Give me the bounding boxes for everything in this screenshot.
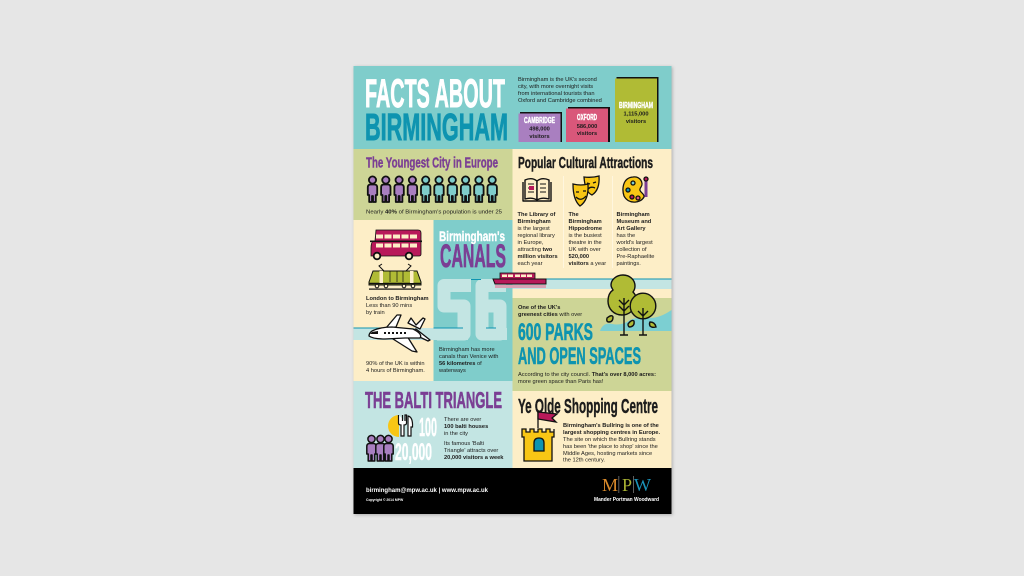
intro text: Birmingham is the UK's second [518, 77, 597, 83]
panel: balti triangle [354, 381, 512, 468]
text: canal fact: Birmingham has more [439, 347, 495, 353]
text: canal fact [438, 347, 498, 374]
bar: Oxford: 586,000 [577, 124, 597, 130]
text: hippodrome: is the busiest [568, 233, 602, 239]
text: hippodrome: UK with over [568, 247, 601, 253]
text: balti visitors: 20,000 visitors a week [444, 455, 504, 461]
icon: plane [369, 315, 430, 352]
text: library: Birmingham [518, 219, 551, 225]
text: library: The Library of [518, 212, 556, 218]
number 20,000: 20,000 [395, 439, 432, 466]
contact details: birmingham@mpw.ac.uk | www.mpw.ac.uk [366, 488, 489, 494]
bar: Birmingham: visitors [626, 119, 646, 125]
logo: MPW [602, 475, 651, 495]
text: library [518, 212, 558, 267]
big number 56 [434, 280, 507, 340]
text: museum: has the [616, 233, 635, 239]
panel: popular cultural attractions [512, 149, 672, 279]
text: train time: by train [366, 310, 385, 316]
text: bullring: has been 'the place to shop' since the [563, 444, 658, 450]
text: hippodrome: The [568, 212, 579, 218]
panel: canals [434, 220, 512, 381]
text: bullring [563, 423, 660, 464]
text: train time [366, 296, 429, 316]
heading: 600 parks [518, 319, 641, 370]
text: balti houses: in the city [444, 431, 468, 437]
logo: MPW: M [602, 475, 618, 495]
heading: canals: Birmingham's [439, 228, 505, 244]
text: balti visitors [444, 441, 504, 461]
text: bullring: the 12th century. [563, 458, 605, 464]
text: library: in Europe, [518, 240, 544, 246]
panel: balti triangle: 100 [419, 412, 437, 442]
intro text: from international tourists than [518, 91, 595, 97]
bar: Birmingham: BIRMINGHAM [619, 101, 653, 110]
heading: balti triangle: THE BALTI TRIANGLE [365, 387, 502, 413]
icon: castle [522, 411, 557, 461]
heading: 600 parks: AND OPEN SPACES [518, 343, 641, 370]
text: greenest cities [518, 305, 582, 318]
text: library: regional library [518, 233, 555, 239]
text: travel distance: 90% of the UK is within [366, 361, 424, 367]
pictogram: ten people, four highlighted [368, 176, 497, 202]
title [365, 72, 508, 149]
text: bullring: largest shopping centres in Europe. [563, 430, 660, 436]
text: hippodrome: Birmingham [568, 219, 602, 225]
panel: canals: CANALS [440, 238, 506, 274]
text: hippodrome [568, 212, 606, 267]
text: balti visitors: Triangle' attracts over [444, 448, 498, 454]
bar: Cambridge: 498,000 [529, 126, 550, 132]
bar: Cambridge: visitors [529, 134, 550, 140]
logo: MPW: W [634, 475, 651, 495]
icon: open book [523, 179, 551, 201]
text: bullring: Middle Ages, hosting markets since [563, 451, 652, 457]
text: balti houses: There are over [444, 417, 481, 423]
bar: Cambridge: CAMBRIDGE [524, 116, 555, 125]
text: greenest cities: greenest cities with over [518, 312, 582, 318]
icon: theatre masks [573, 176, 599, 206]
title: BIRMINGHAM [365, 107, 508, 149]
text: museum: collection of [616, 247, 647, 253]
heading: shopping centre: Ye Olde Shopping Centre [518, 396, 658, 418]
text: travel distance [366, 361, 425, 374]
text: hippodrome: 520,000 [568, 254, 589, 260]
icon: group of people [367, 435, 393, 461]
panel: transport [354, 220, 434, 381]
text: museum: Pre-Raphaelite [616, 254, 654, 260]
copyright: Copyright © 2014 MPW [366, 498, 404, 502]
poster background [354, 66, 672, 514]
text: canal fact: canals than Venice with [439, 354, 498, 360]
text: hippodrome: visitors a year [568, 261, 606, 267]
text: museum: world's largest [616, 240, 653, 246]
text: balti houses: 100 balti houses [444, 424, 488, 430]
intro text: Oxford and Cambridge combined [518, 98, 602, 104]
text: balti visitors: Its famous 'Balti [444, 441, 484, 447]
intro text [518, 77, 602, 104]
icon: palette [623, 177, 648, 202]
text: canal fact: 56 kilometres of [439, 361, 482, 367]
logo: MPW: P [622, 475, 632, 495]
intro text: city, with more overnight visits [518, 84, 593, 90]
text: hippodrome: theatre in the [568, 240, 602, 246]
text: library: attracting two [518, 247, 553, 253]
title: FACTS ABOUT [365, 72, 505, 116]
caption: green space: According to the city council. That's over 8,000 acres: [518, 372, 656, 378]
logo caption: Mander Portman Woodward [594, 497, 659, 503]
heading: canals [439, 228, 506, 274]
text: museum: Birmingham [616, 212, 650, 218]
heading: youngest city: The Youngest City in Europe [366, 154, 498, 172]
bar: Oxford: OXFORD [577, 113, 597, 122]
text: bullring: The site on which the Bullring stands [563, 437, 656, 443]
icon: cutlery [388, 415, 413, 437]
bar: Oxford [566, 107, 610, 142]
text: museum: paintings. [616, 261, 641, 267]
panel: footer [354, 468, 672, 514]
panel: shopping centre [512, 391, 672, 468]
bar: Oxford: visitors [577, 131, 597, 137]
text: balti houses [444, 417, 488, 437]
panel: youngest city [354, 149, 512, 220]
text: train time: London to Birmingham [366, 296, 429, 302]
bar: Birmingham [615, 77, 658, 142]
text: library: each year [518, 261, 543, 267]
text: greenest cities: One of the UK's [518, 305, 560, 311]
caption: green space: more green space than Paris has! [518, 379, 604, 385]
bar: Birmingham: 1,115,000 [624, 112, 648, 118]
panel: parks [512, 275, 672, 391]
caption: population: Nearly 40% of Birmingham's population is under 25 [366, 210, 502, 216]
bar: Cambridge [518, 112, 562, 142]
text: museum: Art Gallery [616, 226, 646, 232]
text: museum [616, 212, 654, 267]
panel: header [354, 66, 672, 149]
caption: green space [518, 372, 656, 385]
heading: 600 parks: 600 PARKS [518, 319, 593, 346]
text: canal fact: waterways [438, 368, 466, 374]
icon: tram [369, 264, 421, 290]
text: travel distance: 4 hours of Birmingham. [366, 368, 425, 374]
text: hippodrome: Hippodrome [568, 226, 602, 232]
text: train time: Less than 90 mins [366, 303, 412, 309]
text: library: million visitors [518, 254, 558, 260]
heading: attractions: Popular Cultural Attractions [518, 155, 653, 172]
icon: trees [607, 275, 656, 335]
icon: narrowboat [493, 273, 546, 288]
text: museum: Museum and [616, 219, 652, 225]
icon: bus [370, 230, 422, 259]
text: bullring: Birmingham's Bullring is one of the [563, 423, 659, 429]
text: library: is the largest [518, 226, 550, 232]
